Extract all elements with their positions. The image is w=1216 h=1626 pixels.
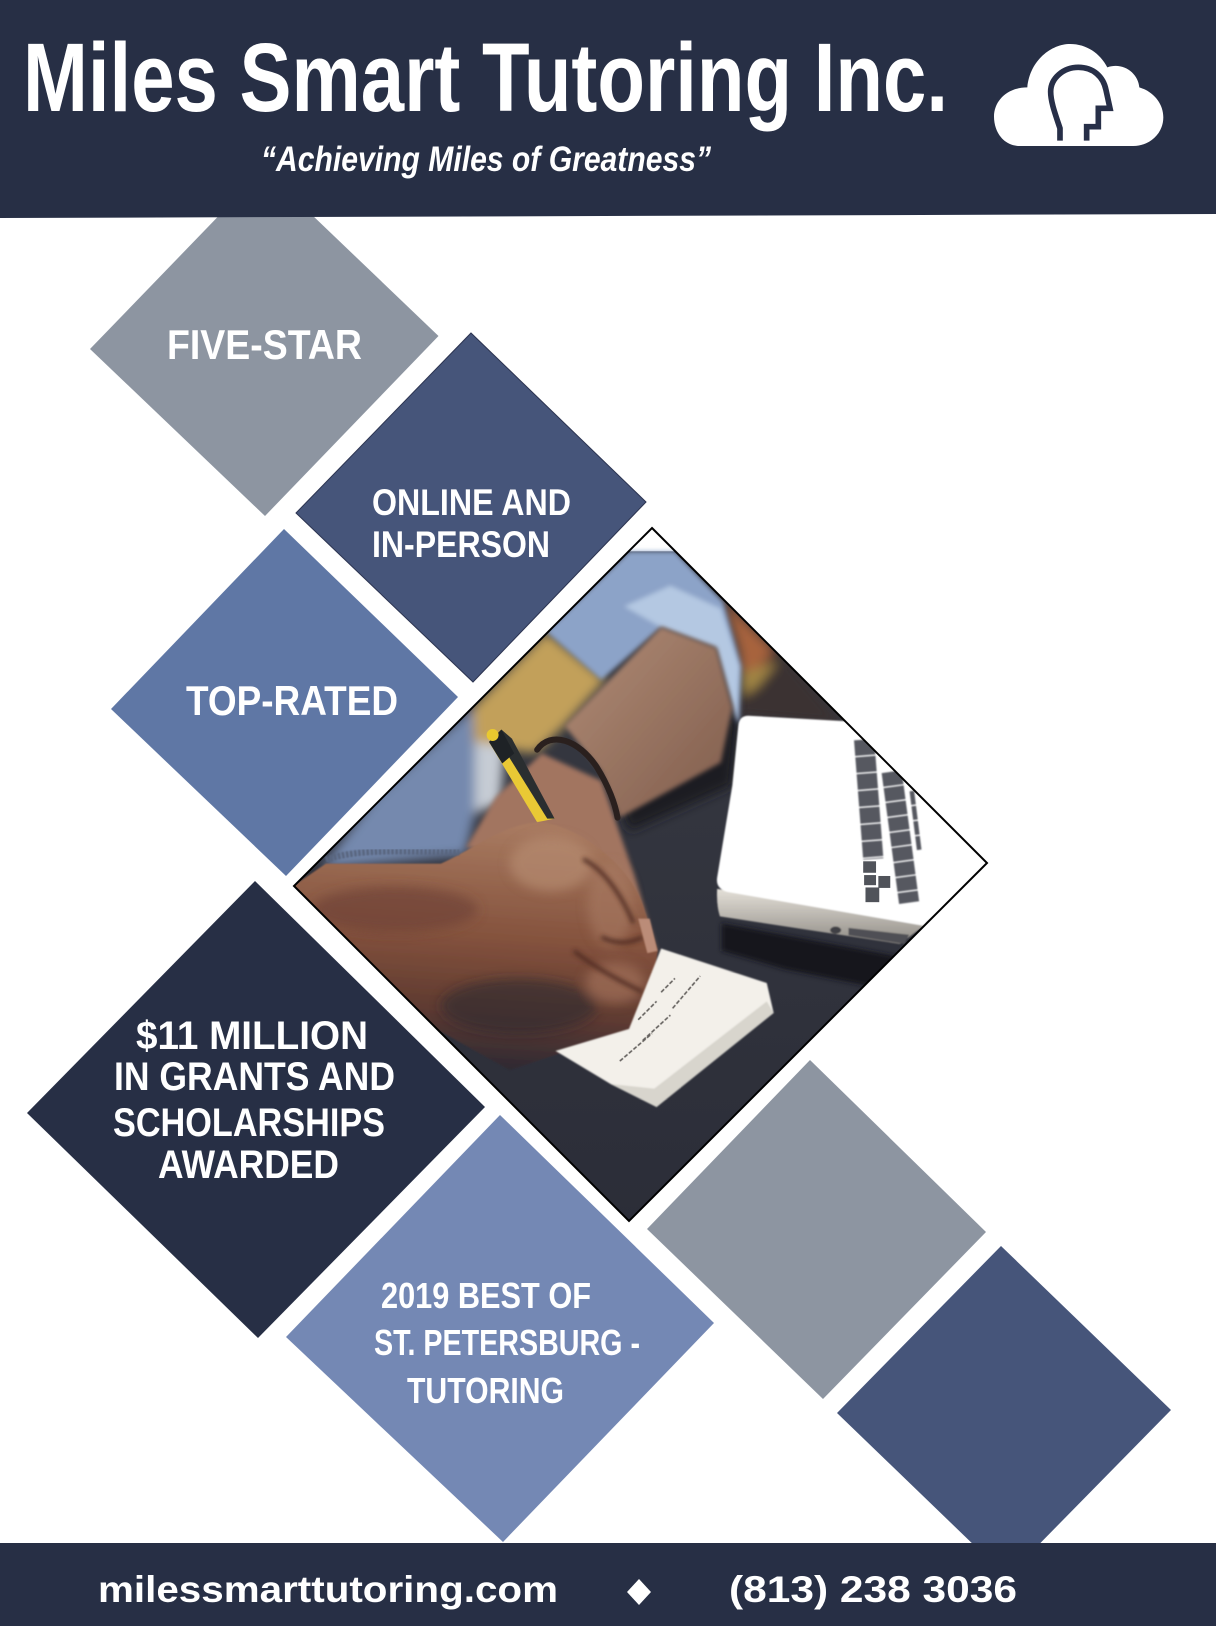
label: online and in-person: [372, 482, 571, 565]
photo upper forearm: [565, 627, 732, 818]
title: Miles Smart Tutoring Inc.: [23, 23, 948, 132]
photo bracelet: [537, 739, 618, 818]
photo laptop: [717, 716, 996, 988]
photo shirt sleeve: [546, 551, 741, 726]
tagline: “Achieving Miles of Greatness”: [261, 140, 711, 179]
diamond: online and in-person: [296, 333, 646, 682]
header band: [0, 0, 1216, 218]
label: $11 million in grants and scholarships awarded: SCHOLARSHIPS: [113, 1101, 385, 1145]
photo hand shading: [312, 836, 645, 1033]
label: $11 million in grants and scholarships awarded: AWARDED: [158, 1143, 339, 1187]
label: $11 million in grants and scholarships awarded: IN GRANTS AND: [114, 1055, 395, 1099]
label: top-rated: TOP-RATED: [186, 677, 398, 724]
label: online and in-person: ONLINE AND: [372, 482, 571, 523]
label: online and in-person: IN-PERSON: [372, 524, 550, 565]
label: five-star: FIVE-STAR: [167, 321, 362, 368]
label: 2019 best of st. petersburg tutoring: ST. PETERSBURG -: [374, 1322, 640, 1363]
photo table surface: [296, 551, 934, 1220]
diamond: five-star: [90, 169, 438, 516]
photo arm hair cuff: [326, 851, 459, 860]
icon: footer diamond: [627, 1579, 651, 1605]
footer website: milessmarttutoring.com: [98, 1569, 558, 1610]
diamond: grants and scholarships: [27, 881, 485, 1338]
diamond: navy decorative: [837, 1246, 1171, 1577]
photo arrow keys: [863, 861, 890, 902]
label: 2019 best of st. petersburg tutoring: [374, 1275, 640, 1411]
icon: cloud with head: [994, 44, 1163, 146]
diamond: gray decorative: [647, 1060, 986, 1399]
label: 2019 best of st. petersburg tutoring: TUTORING: [407, 1370, 564, 1411]
photo background objects: [321, 593, 845, 868]
photo paper note: [556, 949, 774, 1107]
photo keyboard: [864, 740, 919, 903]
label: $11 million in grants and scholarships awarded: [113, 1014, 395, 1187]
label: 2019 best of st. petersburg tutoring: 2019 BEST OF: [381, 1275, 591, 1316]
photo far hand: [466, 753, 657, 953]
footer phone: (813) 238 3036: [729, 1569, 1017, 1610]
diamond: 2019 best of st. petersburg: [286, 1115, 714, 1542]
photo handwriting: [620, 976, 700, 1061]
label: $11 million in grants and scholarships awarded: $11 MILLION: [136, 1014, 368, 1058]
photo writing hand: [294, 822, 657, 1070]
footer band: [0, 1543, 1216, 1626]
photo pen: [487, 729, 555, 822]
diamond: top-rated: [111, 529, 458, 876]
photo: hand writing beside laptop: [280, 510, 1000, 1231]
